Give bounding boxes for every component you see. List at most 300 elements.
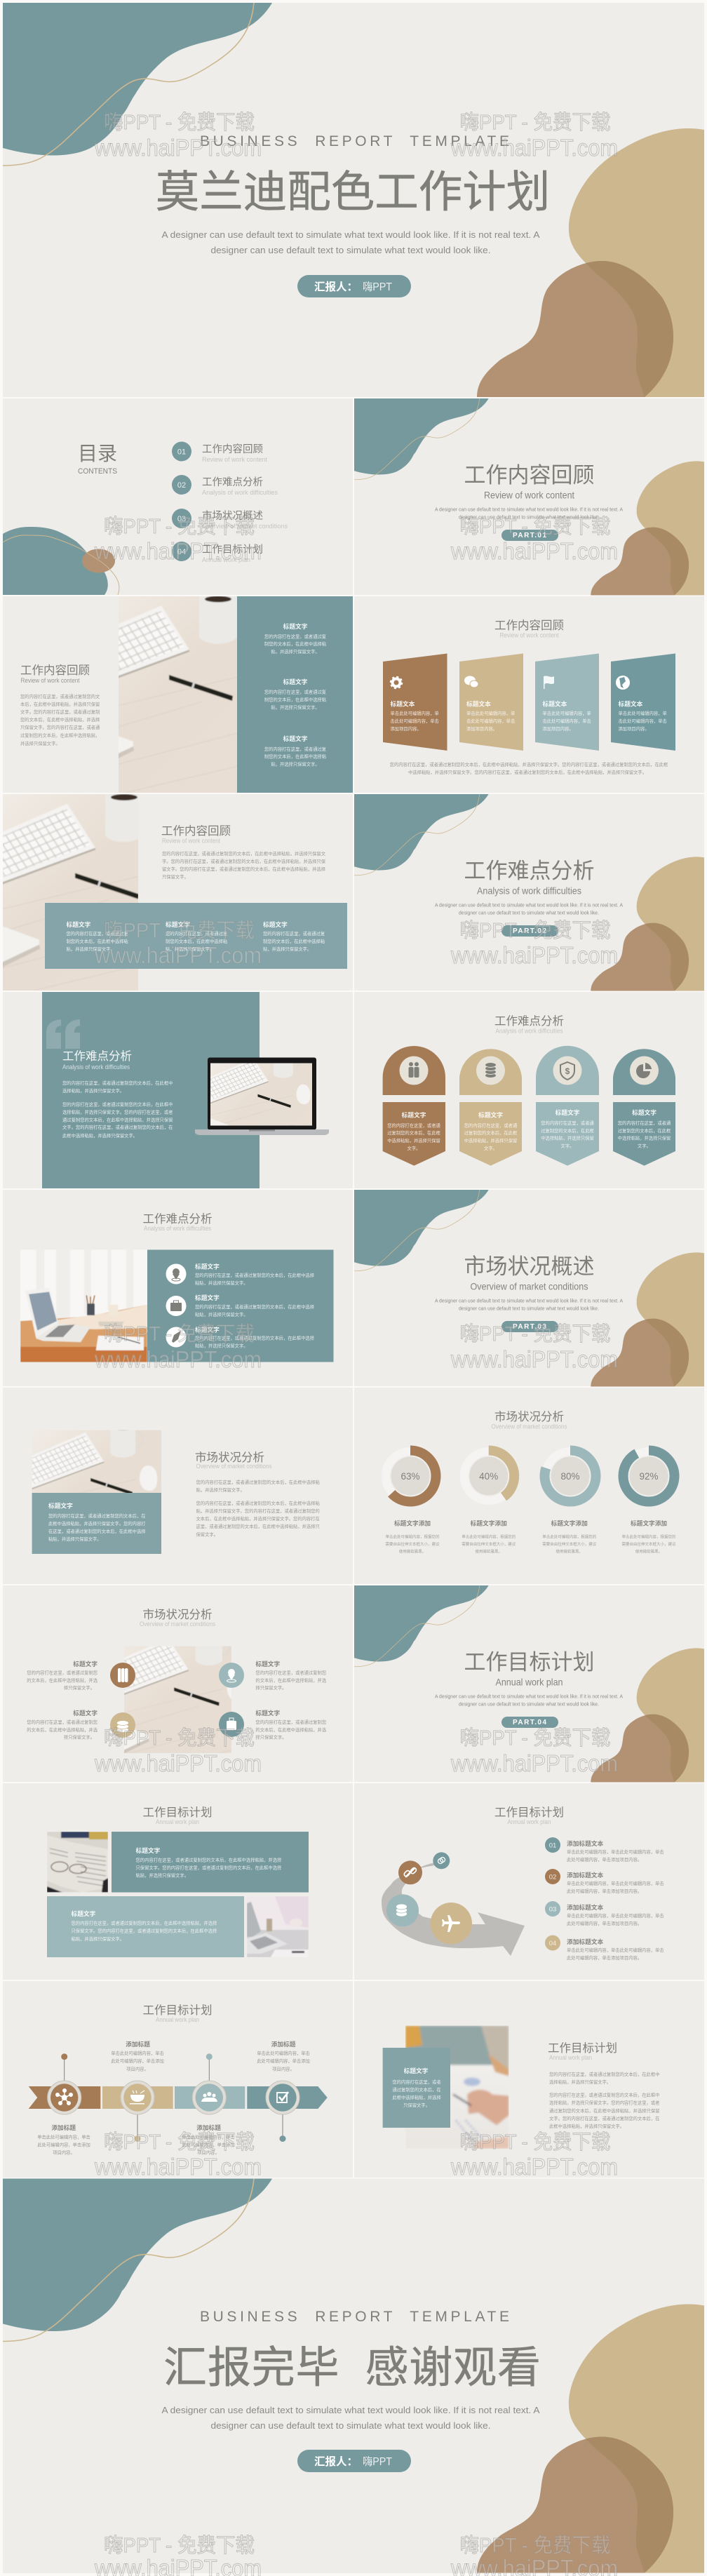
card 4: 击此处可编辑内容，单击: [619, 718, 667, 724]
watermark row 1: 嗨PPT - 免费下载: [460, 111, 610, 134]
slide 15: section 04: [354, 1585, 704, 1782]
section blobs: [354, 398, 704, 595]
donut 63%: [384, 1451, 436, 1501]
donut 40%: 40%: [479, 1471, 498, 1482]
closing blobs: [3, 2179, 704, 2573]
slide 18: plan timeline ribbon: [3, 1981, 353, 2178]
panel paragraph 1: 您的内容打在这里，或者通过复制您的文本后，在此框中: [62, 1080, 173, 1086]
heading: [143, 2004, 212, 2023]
watermark row 7: [94, 2534, 618, 2576]
heading: [494, 1806, 564, 1825]
section description: A designer can use default text to simulate what text would look like. If it is not real text. A: [435, 1693, 623, 1700]
heading: Annual work plan: [156, 2016, 199, 2023]
column item 3: [264, 734, 327, 767]
timeline text bottom 2: [182, 2124, 235, 2155]
arch card 3: $: [565, 1066, 570, 1076]
list item 01: 添加标题文本: [567, 1839, 603, 1847]
left paragraph: 并选择只保留文字。: [20, 740, 60, 746]
card 3: 击此处可编辑内容，单击: [543, 718, 591, 724]
teal card: 此框中选择粘贴，并选择只保留文字。您的内容打: [48, 1520, 146, 1527]
timeline text top 2: 单击此处可编辑内容，单击: [257, 2050, 310, 2056]
laptop on pink desk photo: [247, 1896, 309, 1957]
cover reporter pill: 汇报人：: [314, 280, 358, 293]
card 4: 单击此处可编辑内容，单: [619, 710, 667, 716]
left paragraph: 您的内容打在这里，或者通过复制您的文: [20, 693, 100, 699]
contents item 02: Analysis of work difficulties: [202, 489, 278, 496]
section description: designer can use default text to simulate what text would look like.: [459, 1700, 599, 1708]
section description: A designer can use default text to simulate what text would look like. If it is not real text. A: [435, 1298, 623, 1304]
timeline text top 2: 此处可编辑内容，单击添加: [257, 2058, 310, 2064]
icon: location: [166, 1264, 187, 1284]
contents heading: [78, 443, 117, 476]
node 2: bowl icon: [121, 2081, 154, 2114]
heading: Annual work plan: [508, 1818, 551, 1825]
item 1 text: [195, 1263, 315, 1286]
left item 2: 标题文字: [73, 1709, 97, 1717]
paragraph 2: 选择粘贴，并选择只保留文字。您的内容打在这里，或者: [549, 2099, 659, 2106]
column item 2: 您的内容打在这里，或者通过复: [264, 689, 327, 695]
timeline text bottom 1: 项目内容。: [53, 2149, 75, 2155]
timeline text bottom 1: [37, 2124, 90, 2155]
paragraph: 留文字。您的内容打在这里，或者通过复制您的文本后，在此框中选择粘贴，并选择: [162, 866, 326, 872]
donut caption 1: 需要自由拉伸文本框大小，建议: [385, 1541, 440, 1547]
section description: A designer can use default text to simulate what text would look like. If it is not real text. A: [435, 902, 623, 908]
card 4: [611, 654, 675, 751]
heading: [140, 1608, 215, 1628]
contents item 01: 工作内容回顾: [202, 443, 263, 455]
slide 3: section 01: [354, 398, 704, 595]
arch card 1: 中选择粘贴，并选择只保留: [387, 1137, 440, 1143]
teal card: 您的内容打在这里，或者通过复制您的文本后，在: [48, 1512, 146, 1519]
timeline text bottom 2: 此处可编辑内容，单击添加: [182, 2141, 235, 2148]
watermark row 5: 嗨PPT - 免费下载: [460, 1726, 610, 1750]
column item 2: 贴，并选择只保留文字。: [271, 704, 320, 710]
arch card 3: 文字。: [561, 1142, 574, 1149]
section blobs: [354, 1585, 704, 1782]
watermark row 2: 嗨PPT - 免费下载: [104, 515, 255, 538]
card 1: [383, 654, 447, 751]
arch card 1: 您的内容打在这里，或者通: [387, 1122, 440, 1128]
donut caption 1: [385, 1519, 440, 1555]
band item 3: 制您的文本后，在此框中选择粘: [263, 938, 325, 944]
heading: Annual work plan: [156, 1818, 199, 1825]
section description: designer can use default text to simulate what text would look like.: [459, 1305, 599, 1312]
heading: 工作目标计划: [143, 1806, 212, 1819]
teal card: 粘贴，并选择只保留文字。: [48, 1536, 102, 1542]
heading: 市场状况分析: [494, 1410, 564, 1423]
item 2 text: 您的内容打在这里，或者通过复制您的文本后，在此框中选择: [195, 1303, 315, 1310]
arch card 4: 您的内容打在这里，或者通: [618, 1120, 671, 1126]
watermark row 6: www.haiPPT.com: [450, 2154, 618, 2180]
item 2 text: 标题文字: [195, 1294, 220, 1301]
icon: briefcase: [219, 1712, 244, 1737]
section pill: [501, 530, 558, 541]
section title: 工作目标计划: [464, 1650, 595, 1675]
desk photo: [3, 794, 138, 991]
donut 80%: [544, 1451, 596, 1501]
card 2: 击此处可编辑内容，单击: [466, 718, 515, 724]
paragraph: 字。您的内容打在这里，或者通过复制您的文本后，在此框中选择粘贴，并选择只保: [162, 858, 326, 864]
timeline text top 1: 项目内容。: [126, 2066, 149, 2072]
left item 2: 的文本后，在此框中选择粘贴，并选: [27, 1726, 98, 1733]
slide 6: review with photo and teal band: [0, 780, 353, 1005]
icon: briefcase: [166, 1296, 187, 1316]
timeline text top 1: [111, 2040, 164, 2072]
contents item 03: 市场状况概述: [202, 510, 263, 522]
contents item 04: [172, 542, 263, 563]
slide 11: section 03: [354, 1190, 704, 1386]
timeline text bottom 1: 单击此处可编辑内容，单击: [37, 2134, 90, 2140]
section subtitle: Analysis of work difficulties: [477, 885, 581, 897]
arch card 3: 中选择粘贴，并选择只保留: [541, 1135, 594, 1141]
paragraph 2: 文字。您的内容打在这里，或者通过复制您的文本后，在: [549, 2115, 659, 2121]
left item 1: 您的内容打在这里，或者通过复制您: [27, 1670, 97, 1675]
desk photo: [32, 1430, 161, 1493]
heading: 工作难点分析: [143, 1212, 212, 1226]
watermark row 7: 嗨PPT - 免费下载: [460, 2534, 610, 2557]
watermark row 5: www.haiPPT.com: [450, 1750, 618, 1776]
light teal panel 2: 粘贴，并选择只保留文字。: [72, 1936, 124, 1942]
list item 01: 01: [549, 1842, 556, 1849]
item 2 text: [195, 1294, 315, 1317]
paragraph 2: 您的内容打在这里，或者通过复制您的文本后，在此框中: [549, 2092, 659, 2098]
quote mark: [46, 1019, 80, 1049]
watermark row 5: 嗨PPT - 免费下载: [104, 1726, 255, 1750]
band item 3: 贴，并选择只保留文字。: [263, 946, 311, 952]
section description: designer can use default text to simulate what text would look like.: [459, 514, 599, 521]
slide 9: difficulties with four arch cards: [354, 992, 704, 1188]
right item 1: [255, 1660, 327, 1691]
card 4: 标题文本: [619, 700, 643, 707]
donut caption 3: [542, 1519, 597, 1555]
office laptop photo: [20, 1250, 147, 1362]
node 3: team icon: [192, 2081, 226, 2114]
card 3: 标题文本: [543, 700, 567, 707]
ribbon segments: [29, 2086, 328, 2109]
left item 2: [27, 1709, 98, 1740]
heading: Review of work content: [162, 838, 220, 845]
cover title: 莫兰迪配色工作计划: [156, 168, 550, 217]
donut 63%: 63%: [400, 1471, 420, 1482]
item 1 text: 标题文字: [195, 1263, 220, 1270]
heading: [195, 1451, 272, 1470]
paragraph 2: 文本后，在此框中选择粘贴，并选择只保留文字。您的内容打在: [196, 1515, 320, 1522]
card 1: 单击此处可编辑内容，单: [390, 710, 439, 716]
section subtitle: Review of work content: [484, 490, 574, 501]
band item 3: 您的内容打在这里，或者通过复: [263, 930, 325, 937]
list item 04: 添加标题文本: [567, 1938, 603, 1945]
timeline text top 1: 此处可编辑内容，单击添加: [111, 2058, 164, 2064]
timeline text bottom 2: 添加标题: [196, 2124, 221, 2131]
left paragraph: 只保留文字。您的内容打在这里，或者通: [20, 724, 100, 730]
left item 1: [27, 1660, 98, 1691]
donut caption 4: 使用微软雅黑。: [635, 1549, 662, 1555]
light teal panel 2: [47, 1896, 244, 1957]
timeline text top 2: [257, 2040, 310, 2072]
paragraph: 您的内容打在这里，或者通过复制您的文本后，在此框中选择粘贴，并选择只保留文: [162, 850, 326, 857]
heading: Review of work content: [499, 632, 559, 639]
column item 2: [264, 678, 327, 710]
watermark row 6: www.haiPPT.com: [94, 2154, 262, 2180]
heading: 工作难点分析: [494, 1014, 564, 1028]
list item 01: [545, 1837, 664, 1863]
watermark row 3: 嗨PPT - 免费下载: [104, 919, 255, 942]
band item 1: [66, 920, 128, 952]
node 4: checkbox icon: [266, 2081, 299, 2114]
arch card 2: 过复制您的文本后，在此框: [464, 1129, 518, 1136]
donut 92%: [623, 1451, 675, 1501]
slide 2: contents: [3, 398, 353, 595]
heading: [161, 824, 231, 845]
bottom paragraph: 您的内容打在这里，或者通过复制您的文本后，在此框中选择粘贴，并选择只保留文字。您的内容打在这里，或者通过复制您的文本后，在此框: [390, 761, 668, 767]
book and glasses photo: [47, 1832, 108, 1893]
card 1: 添加项目内容。: [390, 725, 422, 732]
band item 1: 制您的文本后，在此框中选择粘: [66, 938, 128, 944]
watermark row 2: www.haiPPT.com: [94, 538, 262, 564]
node 1: network icon: [48, 2081, 81, 2114]
icon: database: [110, 1712, 135, 1738]
list item 01: 单击此处可编辑内容，单击此处可编辑内容，单击: [567, 1849, 664, 1855]
list item 03: 单击此处可编辑内容，单击此处可编辑内容，单击: [567, 1912, 664, 1919]
donut caption 4: 单击此处可编辑内容，根据您的: [621, 1534, 676, 1540]
right item 2: 择只保留文字。: [255, 1734, 286, 1740]
watermark row 2: [94, 515, 618, 564]
curved arrow: [382, 1863, 525, 1956]
teal panel 1: 只保留文字。您的内容打在这里，或者通过复制您的文本后，在此框中选择: [136, 1865, 282, 1870]
donut caption 2: 标题文字添加: [471, 1519, 507, 1527]
left item 1: 标题文字: [73, 1660, 97, 1668]
item 3 text: 您的内容打在这里，或者通过复制您的文本后，在此框中选择: [195, 1334, 315, 1341]
arch card 1: 文字。: [408, 1145, 420, 1151]
watermark row 2: www.haiPPT.com: [450, 538, 618, 564]
left item 1: 的文本后，在此框中选择粘贴，并选: [27, 1677, 98, 1684]
arch card 3: 过复制您的文本后，在此框: [541, 1127, 594, 1134]
list item 02: 添加标题文本: [567, 1871, 603, 1879]
teal card: 标题文字: [404, 2067, 429, 2074]
teal card: 通过复制您的文本后，在: [392, 2086, 441, 2093]
arch card 1: [383, 1046, 445, 1166]
heading: [491, 1410, 567, 1430]
list item 02: 此处可编辑内容，单击添加项目内容。: [567, 1888, 642, 1894]
right item 1: 择只保留文字。: [255, 1684, 286, 1691]
list item 04: [545, 1935, 664, 1961]
section blobs: [354, 794, 704, 991]
left heading: [20, 664, 90, 684]
contents item 02: 02: [177, 481, 186, 490]
heading: Overview of market conditions: [140, 1621, 215, 1628]
slide 13: market donut charts: [354, 1388, 704, 1584]
timeline text bottom 1: 此处可编辑内容，单击添加: [37, 2141, 90, 2148]
right item 2: 标题文字: [255, 1709, 280, 1717]
card 2: 添加项目内容。: [466, 725, 497, 732]
item 3 text: 粘贴，并选择只保留文字。: [195, 1343, 248, 1348]
section pill: PART.02: [513, 927, 546, 935]
watermark row 4: www.haiPPT.com: [94, 1346, 262, 1372]
heading: [143, 1212, 212, 1232]
donut 92%: 92%: [639, 1471, 659, 1482]
slide 12: market with photo card: [3, 1388, 353, 1584]
panel paragraph 1: 选择粘贴，并选择只保留文字。: [62, 1087, 124, 1094]
light teal panel 2: 标题文字: [72, 1910, 96, 1917]
bottom paragraph: 中选择粘贴，并选择只保留文字。您的内容打在这里，或者通过复制您的文本后，在此框中选择粘贴，并选择只保留文字。: [408, 769, 647, 775]
section pill: PART.01: [513, 532, 546, 539]
donut caption 4: 标题文字添加: [631, 1519, 667, 1527]
contents item 02: 工作难点分析: [202, 476, 263, 488]
contents heading: CONTENTS: [78, 467, 117, 476]
donut caption 3: 单击此处可编辑内容，根据您的: [542, 1534, 597, 1540]
arch card 2: [459, 1049, 522, 1166]
heading: 工作目标计划: [548, 2041, 617, 2055]
section pill: PART.03: [513, 1323, 546, 1331]
arch card 4: 文字。: [638, 1142, 651, 1149]
watermark row 6: [94, 2131, 618, 2180]
right item 1: 标题文字: [255, 1660, 280, 1668]
section title: 市场状况概述: [464, 1254, 595, 1279]
pin dots: [61, 2053, 285, 2142]
watermark row 3: 嗨PPT - 免费下载: [460, 919, 610, 942]
light teal panel 2: 只保留文字。您的内容打在这里，或者通过复制您的文本后，在此框中选择: [72, 1928, 217, 1933]
arch card 1: 过复制您的文本后，在此框: [387, 1129, 440, 1136]
column item 3: 标题文字: [283, 734, 308, 742]
contents item 01: [172, 442, 267, 463]
heading: [548, 2041, 617, 2061]
laptop mockup: [195, 1046, 329, 1162]
watermark row 7: 嗨PPT - 免费下载: [104, 2534, 255, 2557]
arch card 3: 标题文字: [556, 1108, 580, 1116]
band item 1: 您的内容打在这里，或者通过复: [66, 930, 128, 937]
list item 03: 添加标题文本: [567, 1903, 603, 1911]
left heading: Review of work content: [21, 677, 80, 684]
band item 2: 标题文字: [166, 920, 190, 928]
column item 3: 贴，并选择只保留文字。: [271, 760, 320, 767]
section pill: PART.04: [513, 1719, 546, 1726]
timeline text bottom 1: 添加标题: [51, 2124, 76, 2131]
section pill: [501, 1717, 558, 1728]
left paragraph: 文字。您的内容打在这里，或者通过复制: [20, 709, 100, 715]
heading: Analysis of work difficulties: [144, 1225, 211, 1232]
slide 7: section 02: [354, 794, 704, 991]
paragraph 2: 贴，并选择只保留文字。您的内容打在这里，或者通过复制您的: [196, 1508, 320, 1514]
icon: location: [219, 1663, 244, 1688]
list item 01: 此处可编辑内容，单击添加项目内容。: [567, 1856, 642, 1863]
icon: link: [398, 1860, 422, 1884]
left paragraph: 本后，在此框中选择粘贴，并选择只保留: [20, 701, 100, 707]
left paragraph: 过复制您的文本后，在此框中选择粘贴，: [20, 732, 100, 738]
watermark row 5: [94, 1726, 618, 1776]
section pill: [501, 925, 558, 937]
band item 2: 制您的文本后，在此框中选择粘: [166, 938, 228, 944]
timeline text top 2: 项目内容。: [272, 2066, 295, 2072]
closing description: designer can use default text to simulate what text would look like.: [210, 2420, 491, 2431]
item 2 text: 粘贴，并选择只保留文字。: [195, 1311, 248, 1317]
card 3: [535, 654, 599, 751]
column item 1: 贴，并选择只保留文字。: [271, 648, 320, 655]
paragraph 1: 您的内容打在这里，或者通过复制您的文本后，在此框中选择粘: [196, 1479, 321, 1485]
band item 1: 贴，并选择只保留文字。: [66, 946, 115, 952]
section pill: [501, 1321, 558, 1332]
heading: Overview of market conditions: [196, 1463, 272, 1470]
watermark row 6: 嗨PPT - 免费下载: [460, 2131, 610, 2154]
arch card 1: 标题文字: [402, 1111, 426, 1118]
list item 02: [545, 1869, 664, 1894]
column item 1: 标题文字: [283, 622, 308, 630]
timeline text top 2: 添加标题: [271, 2040, 296, 2048]
heading: [494, 1014, 564, 1035]
closing reporter pill: [297, 2450, 411, 2472]
contents item 03: [172, 509, 288, 530]
icon: airplane: [431, 1903, 472, 1944]
card 4: 添加项目内容。: [619, 725, 649, 732]
donut caption 2: 需要自由拉伸文本框大小，建议: [462, 1541, 516, 1547]
heading: 工作内容回顾: [494, 619, 564, 632]
contents item 01: Review of work content: [202, 456, 267, 463]
heading: 市场状况分析: [143, 1608, 212, 1621]
watermark row 4: www.haiPPT.com: [450, 1346, 618, 1372]
teal card: [32, 1493, 161, 1554]
list item 04: 此处可编辑内容，单击添加项目内容。: [567, 1954, 642, 1961]
watermark row 3: www.haiPPT.com: [94, 942, 262, 968]
closing reporter pill: 汇报人：: [314, 2455, 358, 2468]
arch card 4: [613, 1049, 675, 1166]
timeline text bottom 2: 项目内容。: [197, 2149, 220, 2155]
section blobs: [354, 1190, 704, 1386]
donut caption 3: 标题文字添加: [551, 1519, 588, 1527]
teal panel: [147, 1250, 334, 1362]
donut caption 2: [462, 1519, 516, 1555]
paragraph: 只保留文字。: [162, 873, 189, 880]
item 1 text: 您的内容打在这里，或者通过复制您的文本后，在此框中选择: [195, 1272, 315, 1278]
heading: [143, 1806, 212, 1825]
paragraph 1: 选择粘贴，并选择只保留文字。: [549, 2079, 611, 2085]
arch card 2: 文字。: [484, 1145, 497, 1151]
watermark row 6: 嗨PPT - 免费下载: [104, 2131, 255, 2154]
left paragraph: 您的文本后，在此框中选择粘贴，并选择: [20, 716, 100, 723]
left item 2: 您的内容打在这里，或者通过复制您: [27, 1719, 97, 1725]
card 3: 添加项目内容。: [543, 725, 574, 732]
column item 3: 您的内容打在这里，或者通过复: [264, 746, 327, 752]
heading: 市场状况分析: [195, 1451, 264, 1464]
arch card 2: 您的内容打在这里，或者通: [464, 1122, 518, 1128]
heading: Overview of market conditions: [491, 1423, 567, 1430]
left heading: 工作内容回顾: [20, 664, 90, 677]
teal card: 您的内容打在这里，或者: [392, 2079, 441, 2085]
teal panel: [42, 992, 260, 1188]
list item 03: 03: [549, 1905, 556, 1914]
slide 14: market with central photo: [3, 1585, 353, 1782]
light teal panel 2: 您的内容打在这里，或者通过复制您的文本后，在此框中选择粘贴，并选择: [72, 1920, 217, 1926]
icon: database: [386, 1894, 419, 1926]
timeline text top 1: 单击此处可编辑内容，单击: [111, 2050, 164, 2056]
donut caption 1: 使用微软雅黑。: [399, 1549, 426, 1555]
card 1: 标题文本: [390, 700, 415, 707]
panel paragraph 2: 选择粘贴，并选择只保留文字。您的内容打在这里，或者: [62, 1108, 173, 1115]
card 2: 单击此处可编辑内容，单: [466, 710, 515, 716]
arch card 3: [536, 1046, 599, 1166]
heading: Analysis of work difficulties: [495, 1028, 563, 1035]
arch card 2: 标题文字: [478, 1111, 503, 1118]
contents item 04: 工作目标计划: [202, 544, 263, 556]
paragraph 2: 此框中选择粘贴，并选择只保留文字。: [549, 2123, 624, 2129]
paragraph 2: 您的内容打在这里，或者通过复制您的文本后，在此框中选择粘: [196, 1500, 321, 1506]
cover reporter pill: [297, 275, 411, 297]
watermarks overlay: [94, 111, 618, 2576]
column item 3: 制您的文本后，在此框中选择粘: [264, 753, 327, 760]
band item 2: 您的内容打在这里，或者通过复: [166, 930, 228, 937]
right item 1: 的文本后，在此框中选择粘贴，并选: [255, 1677, 327, 1684]
right item 2: 您的内容打在这里，或者通过复制您: [255, 1719, 326, 1725]
band item 2: [166, 920, 228, 952]
hands on chart photo: [405, 2026, 509, 2149]
